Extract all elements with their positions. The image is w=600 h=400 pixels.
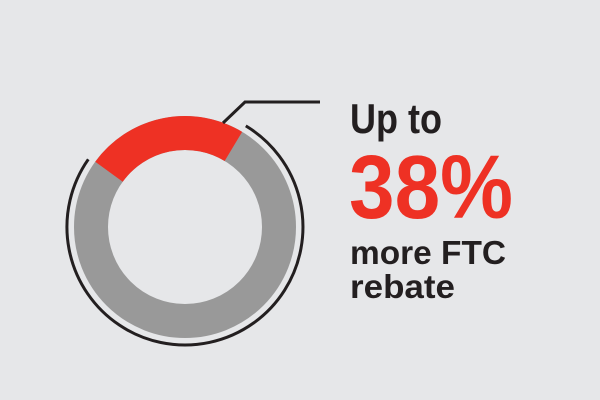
text block: more FTC: [350, 234, 506, 271]
text block: rebate: [350, 268, 455, 305]
leader line: [223, 102, 320, 123]
outer black arc: [67, 126, 303, 345]
red segment: [109, 133, 233, 172]
text block: [349, 95, 513, 305]
text block: 38%: [349, 138, 513, 238]
donut chart: [67, 126, 303, 345]
text block: Up to: [350, 95, 442, 142]
